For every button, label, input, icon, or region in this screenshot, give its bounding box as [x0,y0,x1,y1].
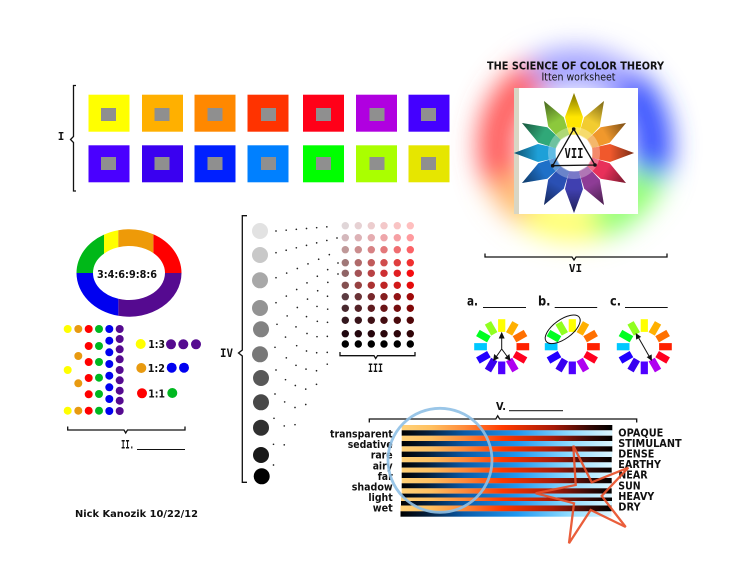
panel VI: title and Itten star with glow [485,60,667,275]
panel III: tint and shade matrix [340,222,415,375]
wheel a [474,319,529,374]
label II: II. [121,438,134,452]
row 2 squares [88,145,450,182]
label V: V. [496,400,506,413]
dot field [64,325,124,415]
label I: I [58,130,64,143]
bracket I [70,86,76,191]
left labels: wet [373,502,393,515]
right labels: OPAQUE [618,426,663,439]
wheel c [617,319,672,374]
triangle [553,129,595,166]
bracket IV [238,216,247,482]
wheel b heading: b. [538,294,550,310]
subtitle: Itten worksheet [542,72,616,84]
red star outline [536,446,628,543]
wheel c heading [610,294,668,310]
left labels: light [368,491,393,504]
panel V: color contrast stripes [330,400,682,543]
proportion ring [76,229,182,317]
left labels: airy [373,459,393,472]
ratio 1:3 [136,338,201,351]
title: THE SCIENCE OF COLOR THEORY [487,60,664,72]
author credit: Nick Kanozik 10/22/12 [75,509,198,520]
left labels: rare [371,449,393,462]
right labels: SUN [618,479,641,492]
answer line V [509,410,563,411]
right labels: EARTHY [618,458,662,471]
dotted connectors [274,226,340,465]
triangle vertices [551,127,597,168]
star color wheel [514,93,634,213]
bracket VI [485,254,667,260]
right labels: DRY [618,501,642,514]
ratio 1:1 [137,388,177,400]
gray circles [252,223,270,484]
wheel b analogous ellipse [541,310,585,349]
answer line II [137,449,185,450]
wheel a arrows [494,333,510,360]
matrix dots [342,222,414,348]
wheel b [545,319,600,374]
panel IV: gray value scale [220,216,340,484]
right labels: STIMULANT [618,437,682,450]
panel I: simultaneous contrast squares [58,86,450,191]
image card [514,88,638,214]
rainbow glow [497,67,653,223]
ratio 1:3: 1:3 [148,338,165,351]
card edge strip [514,88,519,214]
label III: III [368,361,383,375]
ratio 1:2: 1:2 [148,362,165,375]
wheel a heading: a. [467,294,478,310]
label VII: VII [564,147,584,162]
row 1 squares [88,95,450,132]
ratio text: 3:4:6:9:8:6 [97,268,157,281]
blue circle outline [388,408,492,512]
right labels [618,426,682,514]
left labels: transparent [330,428,393,440]
label VI: VI [569,262,582,275]
left labels [330,428,393,515]
bracket II [68,426,185,433]
left labels: far [378,470,393,483]
wheel b heading [538,294,597,310]
wheel c heading: c. [610,294,621,310]
wheel c double arrow [636,334,651,360]
right labels: NEAR [618,469,648,482]
stripes [400,425,612,517]
ratio 1:1: 1:1 [148,388,165,400]
right labels: HEAVY [618,490,655,503]
bracket III [340,352,415,358]
left labels: sedative [348,438,393,451]
wheel a heading [467,294,526,310]
bracket V [369,416,637,422]
left labels: shadow [352,480,393,494]
right labels: DENSE [618,448,654,461]
panel II: proportion ring and dots [64,229,201,452]
label IV: IV [220,346,233,360]
ratio 1:2 [136,362,189,375]
panel: color harmony wheels a b c [467,294,672,374]
